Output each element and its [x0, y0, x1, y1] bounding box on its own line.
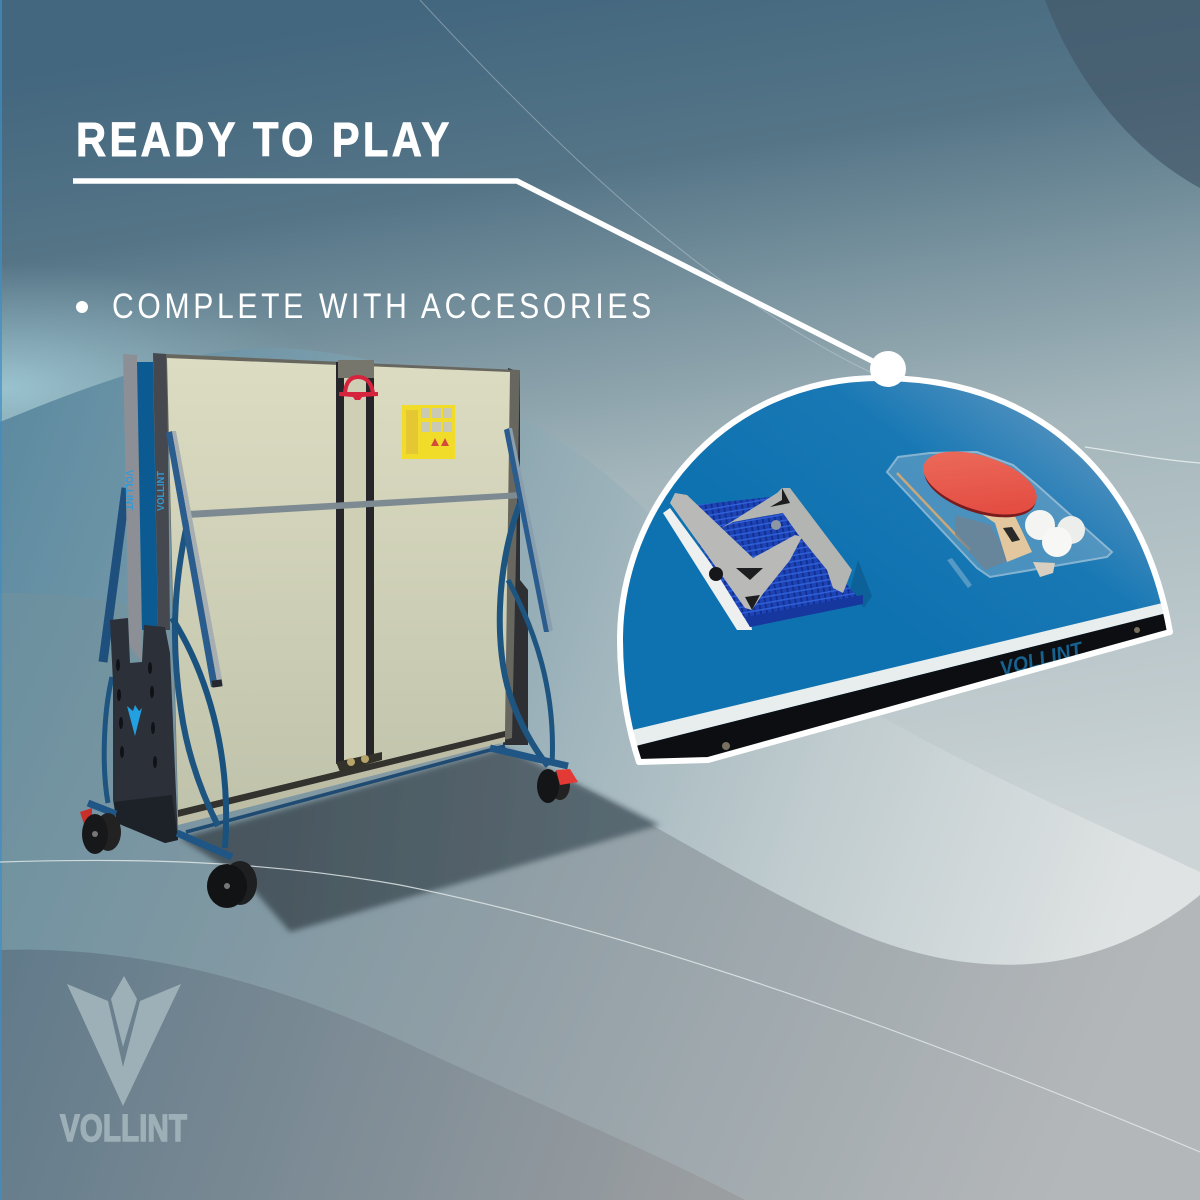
- left wheel: [82, 813, 121, 854]
- right wheel: [537, 769, 570, 803]
- left folded leg: [166, 431, 223, 688]
- left brake pedal: [80, 808, 92, 824]
- red handle: [339, 377, 378, 400]
- connector dot: [870, 351, 906, 387]
- centre rails: [336, 360, 382, 772]
- inset white outline: [620, 378, 1170, 762]
- connector line: [73, 181, 888, 369]
- front wheel: [207, 861, 257, 908]
- folded table tennis table: [80, 353, 578, 908]
- red brake pedal: [556, 769, 578, 785]
- far left leg: [103, 488, 126, 662]
- crossbar: [188, 492, 522, 518]
- bullet point: COMPLETE WITH ACCESORIES: [112, 286, 651, 326]
- right folded leg: [504, 428, 553, 632]
- base beams: [88, 748, 568, 857]
- table side edge: VOLLINT: [123, 470, 134, 510]
- logo mark: [67, 976, 181, 1106]
- left inner arc: [175, 520, 218, 826]
- table underside panel: [166, 354, 520, 824]
- right arcs: [500, 503, 548, 766]
- table black side: [637, 614, 1166, 759]
- reflected highlight: [1058, 438, 1084, 460]
- inset: accessories close-up: [610, 370, 1180, 770]
- title: READY TO PLAY: [76, 112, 449, 167]
- far left arc: [104, 677, 112, 803]
- right post: [503, 368, 528, 745]
- thin wave line: [0, 860, 1200, 1152]
- logo: Vollint: [60, 976, 187, 1150]
- rivets: [722, 627, 1140, 750]
- brand on table edge: VOLLINT: [998, 638, 1087, 681]
- table surface: [623, 381, 1164, 746]
- table side edge: VOLLINT: [156, 471, 167, 511]
- bottom rail: [186, 746, 505, 832]
- paddle set in blister pack: [887, 439, 1112, 588]
- front arc: [172, 618, 226, 848]
- table side edge: [123, 353, 170, 662]
- net and clamps: [663, 488, 872, 630]
- logo wordmark: VOLLINT: [60, 1108, 187, 1150]
- left black support: [110, 618, 178, 843]
- table shadow: [180, 748, 660, 932]
- table white edge: [620, 600, 1175, 750]
- yellow warning label: [402, 405, 455, 459]
